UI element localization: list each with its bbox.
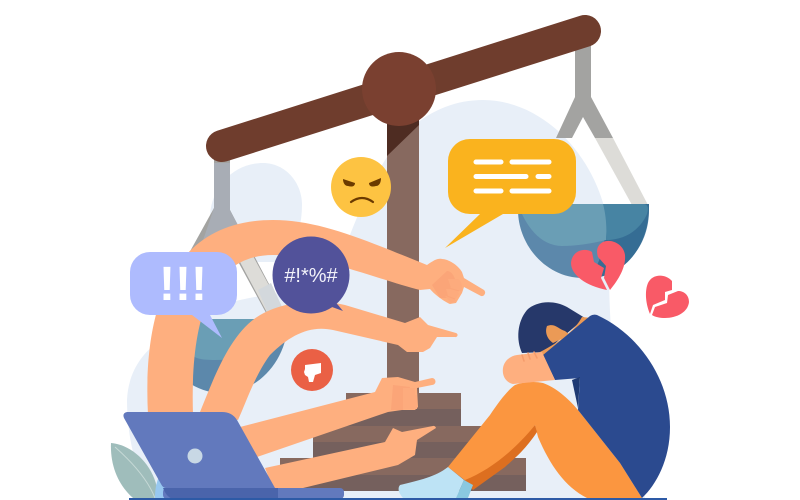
plant leaves	[111, 443, 172, 498]
person: forearm	[503, 352, 555, 384]
scale hub	[362, 52, 436, 126]
person: fingers	[522, 352, 537, 361]
background blob: large	[127, 100, 645, 498]
scale beam	[222, 31, 585, 146]
background blob: small	[210, 163, 302, 262]
angry face emoji	[331, 157, 391, 217]
person: hair	[518, 302, 585, 353]
thumbs down badge	[291, 349, 333, 391]
person: shirt	[543, 315, 670, 498]
right scale pan	[518, 204, 649, 278]
icon: broken heart on pan	[571, 241, 625, 290]
speech bubble: exclamation	[130, 252, 237, 338]
scale post	[387, 118, 419, 398]
person	[399, 302, 670, 498]
arm: third pointing hand	[240, 377, 436, 457]
person: trouser shadow	[465, 425, 537, 490]
person: shirt shadow	[572, 377, 580, 408]
arm: top pointing hand	[147, 220, 485, 415]
speech bubble: grawlix: #!*%#	[284, 265, 339, 287]
person: sock	[399, 467, 464, 498]
arm: second pointing hand	[200, 302, 458, 420]
stairs	[280, 393, 526, 491]
left scale pan	[157, 319, 288, 393]
speech bubble: exclamation: !!!	[159, 258, 207, 311]
left scale hanger	[188, 155, 289, 322]
floor line	[129, 498, 667, 500]
speech bubble: grawlix	[272, 236, 350, 314]
speech bubble: text lines	[445, 139, 576, 248]
laptop	[123, 412, 344, 499]
person: neck and ear	[540, 317, 592, 356]
right scale hanger	[556, 40, 648, 205]
arm: fourth pointing hand	[265, 426, 436, 488]
person: sock heel	[456, 480, 473, 498]
icon: broken heart right	[646, 276, 689, 318]
person: trousers	[448, 382, 642, 498]
